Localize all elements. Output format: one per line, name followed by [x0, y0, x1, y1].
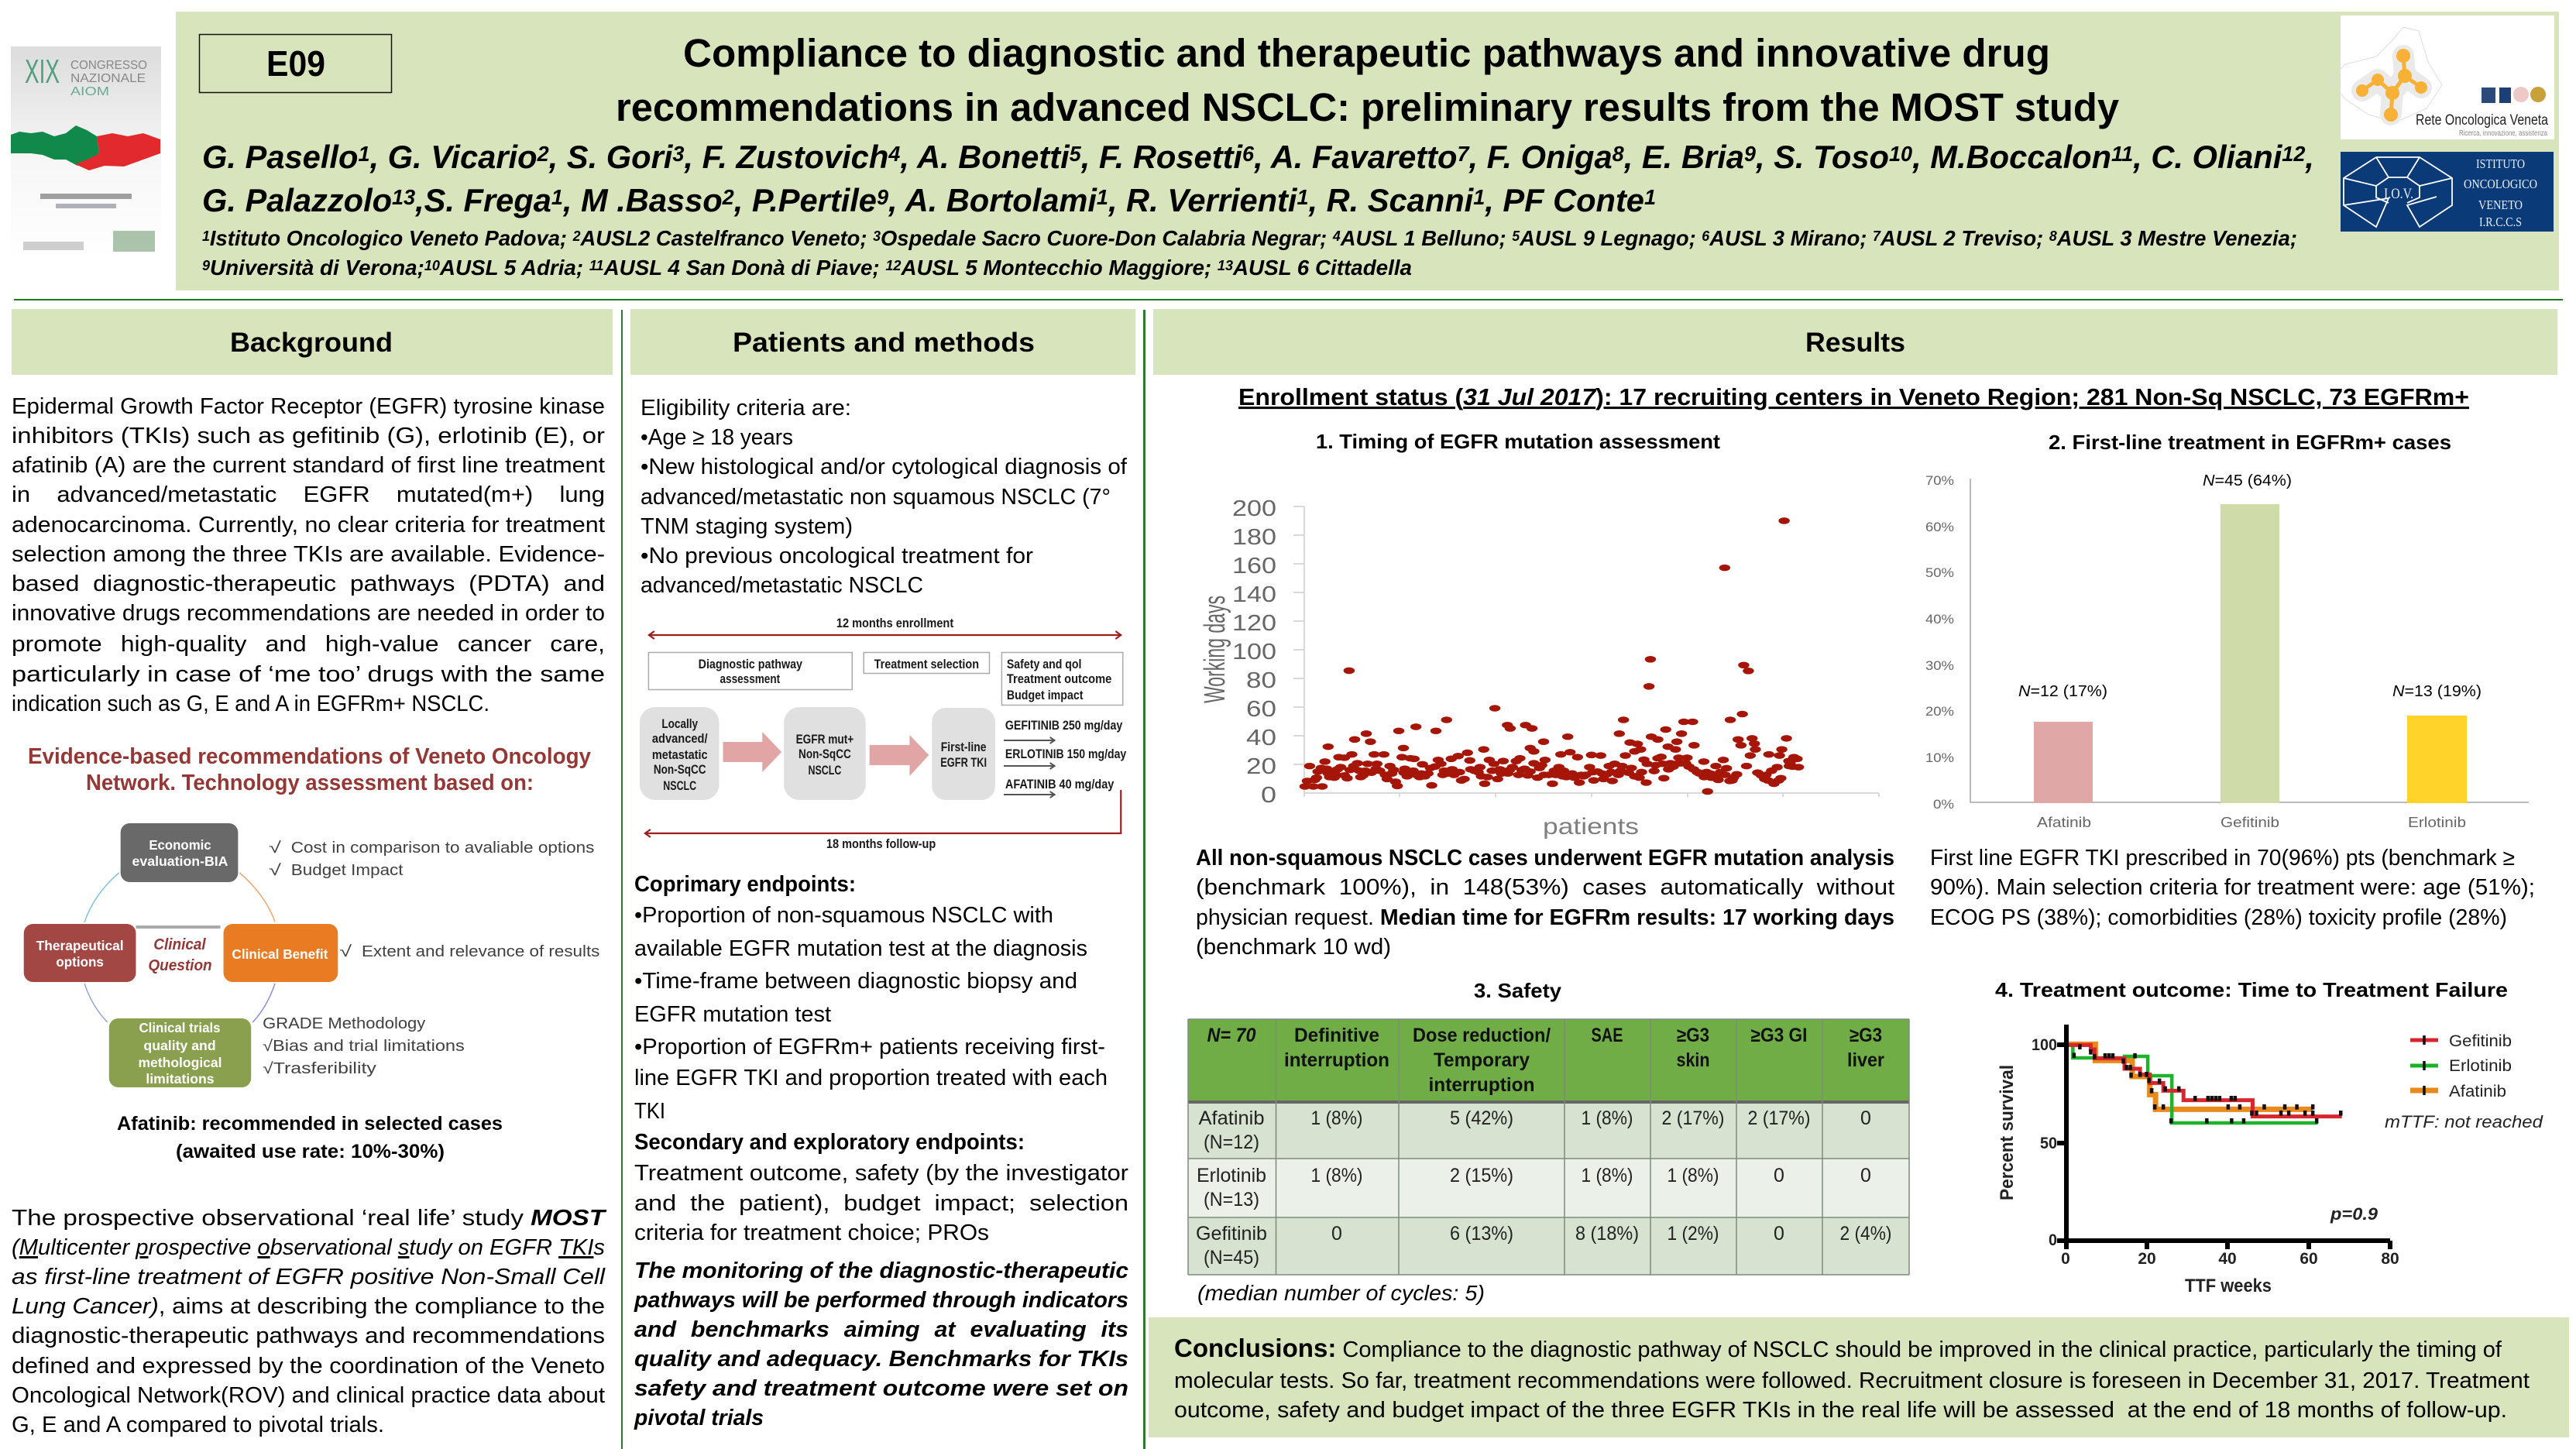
axes: patients: [1543, 814, 1639, 840]
step: first-line EGFR TKI: [932, 708, 995, 800]
header panel: [176, 12, 2559, 290]
row: erlotinib: [1197, 1165, 1871, 1210]
axes: 40%: [1925, 612, 1954, 627]
heading: background: [12, 309, 613, 375]
row: gefitinib: 6 (13%): [1450, 1223, 1513, 1245]
text block: background intro: indication such as G, E and A in EGFRm+ NSCLC.: [12, 692, 489, 716]
step: first-line EGFR TKI: First-line: [941, 740, 987, 754]
authors: [202, 139, 2314, 218]
axes: 140: [1232, 582, 1276, 607]
text block: eligibility: [641, 396, 1128, 598]
treatment arms: GEFITINIB 250 mg/day: [1005, 719, 1123, 733]
box: therapeutical options: [24, 924, 136, 982]
chart: first-line treatment: [1925, 431, 2529, 830]
box: diagnostic pathway assessment: [648, 652, 852, 689]
axes: 0: [2061, 1250, 2070, 1268]
title: Compliance to diagnostic and therapeutic pathways and innovative drug: [683, 31, 2050, 75]
axes: 40: [2218, 1250, 2237, 1268]
heading: results: [1153, 309, 2557, 375]
heading: recommendations: Evidence-based recommendations of Veneto Oncology: [28, 744, 591, 769]
legend: Erlotinib: [2449, 1057, 2512, 1075]
axes: 40: [1246, 726, 1276, 750]
logo: IOV: ONCOLOGICO: [2464, 177, 2537, 191]
affiliations: 9Università di Verona;10AUSL 5 Adria; 11AUSL 4 San Donà di Piave; 12AUSL 5 Montecchio Maggiore; 13AUSL 6 Cittadella: [202, 256, 1412, 280]
table header: liver: [1847, 1049, 1884, 1071]
bar: afatinib: N=12 (17%): [2018, 683, 2107, 700]
logo: IOV: I.O.V.: [2384, 186, 2413, 202]
row: gefitinib: 0: [1331, 1223, 1342, 1245]
step: locally advanced NSCLC: Locally: [661, 717, 699, 731]
step: EGFR mut+: [784, 707, 866, 800]
logo: IOV: I.R.C.C.S: [2479, 215, 2522, 229]
row: afatinib: [1199, 1107, 1871, 1153]
text block: endpoints: line EGFR TKI and proportion treated with each: [634, 1066, 1108, 1090]
row: gefitinib: [1196, 1223, 1891, 1269]
row: gefitinib: Gefitinib: [1196, 1223, 1267, 1245]
step: first-line EGFR TKI: EGFR TKI: [940, 756, 987, 770]
table header: Definitive: [1294, 1025, 1379, 1046]
row: erlotinib: Erlotinib: [1197, 1165, 1266, 1186]
chart title: 1. Timing of EGFR mutation assessment: [1316, 430, 1720, 453]
axes: 20: [2138, 1250, 2156, 1268]
criteria notes: √Trasferibility: [263, 1060, 376, 1077]
row: erlotinib: (N=13): [1204, 1189, 1259, 1210]
box: safety and outcomes: [1001, 652, 1123, 705]
poster code box: [200, 34, 392, 93]
text block: background intro: promote high-quality and high-value cancer care,: [12, 632, 605, 657]
label: clinical question: Clinical: [153, 936, 206, 953]
row: afatinib: 1 (8%): [1310, 1107, 1363, 1129]
text block: chart 2 findings: ECOG PS (38%); comorbidities (28%) toxicity profile (28%): [1930, 905, 2507, 930]
axes: Percent survival: [1997, 1065, 2018, 1200]
row: gefitinib: 2 (4%): [1840, 1223, 1891, 1245]
logo: IOV: ISTITUTO: [2476, 156, 2525, 171]
text block: chart 1 findings: (benchmark 10 wd): [1196, 935, 1391, 960]
logo: congress: AIOM: [70, 85, 109, 98]
treatment arms: ERLOTINIB 150 mg/day: [1005, 747, 1127, 761]
bar: afatinib: Afatinib: [2037, 815, 2091, 830]
title: [616, 31, 2120, 129]
treatment arms: [1004, 719, 1127, 798]
bar: erlotinib: N=13 (19%): [2392, 683, 2482, 700]
callout: afatinib recommendation: (awaited use rate: 10%-30%): [176, 1141, 445, 1162]
text block: background intro: in advanced/metastatic EGFR mutated(m+) lung: [12, 482, 605, 507]
table: safety: [1188, 979, 1909, 1305]
panel: conclusions: [1149, 1317, 2569, 1437]
logo: congress: NAZIONALE: [70, 72, 146, 85]
box: treatment selection: Treatment selection: [874, 658, 979, 671]
text block: eligibility: •Age ≥ 18 years: [641, 425, 793, 450]
axes: 60: [2300, 1250, 2318, 1268]
table header: interruption: [1284, 1049, 1389, 1071]
text block: eligibility: advanced/metastatic non squamous NSCLC (7°: [641, 485, 1111, 510]
row: afatinib: 1 (8%): [1582, 1107, 1633, 1129]
table header: ≥G3: [1677, 1025, 1709, 1046]
panel: conclusions: outcome, safety and budget impact of the three EGFR TKIs in the real life will be assessed at the end of 18 months of follow-up.: [1174, 1398, 2507, 1423]
text block: MOST study: G, E and A compared to pivotal trials.: [12, 1413, 384, 1437]
table header: skin: [1676, 1049, 1710, 1071]
axes: 0: [2049, 1231, 2057, 1249]
text block: endpoints: •Time-frame between diagnostic biopsy and: [634, 969, 1077, 994]
table grid: [1188, 1019, 1909, 1275]
text block: eligibility: advanced/metastatic NSCLC: [641, 573, 923, 598]
affiliations: [202, 226, 2297, 280]
step: EGFR mut+: EGFR mut+: [796, 733, 854, 747]
step: locally advanced NSCLC: advanced/: [652, 732, 708, 746]
legend: Afatinib: [2449, 1083, 2506, 1100]
logo: Rete Oncologica Veneta: Ricerca, innovazione, assistenza: [2459, 129, 2547, 138]
diagram: study flow: [640, 616, 1127, 851]
annotation: p value: p=0.9: [2330, 1204, 2379, 1224]
axes: 160: [1232, 554, 1276, 579]
text block: endpoints: •Proportion of EGFRm+ patients receiving first-: [634, 1035, 1105, 1059]
axes: 0: [1261, 783, 1276, 808]
box: safety and outcomes: Safety and qol: [1007, 658, 1081, 671]
axes: 30%: [1925, 658, 1954, 673]
box: economic evaluation: [121, 823, 238, 882]
box: clinical trials: [109, 1018, 251, 1087]
axes: 60%: [1925, 520, 1954, 534]
text block: monitoring statement: quality and adequacy. Benchmarks for TKIs: [634, 1347, 1128, 1372]
logo: congress: [11, 46, 161, 261]
text block: chart 1 findings: All non-squamous NSCLC cases underwent EGFR mutation analysis: [1196, 846, 1894, 870]
axes: 10%: [1925, 750, 1954, 765]
table header: N= 70: [1207, 1025, 1256, 1046]
criteria notes: Extent and relevance of results: [362, 943, 599, 960]
text block: MOST study: [12, 1206, 607, 1437]
axes: 50%: [1925, 565, 1954, 580]
table title: 3. Safety: [1474, 979, 1562, 1002]
criteria notes: √: [269, 840, 281, 857]
text block: monitoring statement: [634, 1258, 1128, 1430]
panel: conclusions: molecular tests. So far, treatment recommendations were followed. Recruitment closure is foreseen in December 31, 2017. Treatment: [1174, 1368, 2530, 1393]
text block: background intro: innovative drugs recommendations are needed in order to: [12, 601, 605, 626]
text block: endpoints: Secondary and exploratory endpoints:: [634, 1130, 1025, 1155]
step: locally advanced NSCLC: NSCLC: [663, 779, 696, 793]
heading: results: Results: [1805, 328, 1905, 358]
text block: endpoints: TKI: [634, 1099, 665, 1124]
table header: interruption: [1428, 1074, 1535, 1096]
bar: erlotinib: [2392, 683, 2482, 830]
text block: endpoints: [634, 872, 1128, 1245]
arrow: step 2 to 3: [870, 735, 929, 776]
text block: eligibility: •New histological and/or cytological diagnosis of: [641, 455, 1128, 479]
box: clinical trials: quality and: [143, 1038, 216, 1053]
text block: chart 1 findings: physician request. Median time for EGFRm results: 17 working days: [1196, 905, 1894, 930]
criteria notes: Budget Impact: [291, 862, 404, 879]
chart: time to treatment failure: [1995, 978, 2543, 1296]
box: diagnostic pathway assessment: Diagnostic pathway: [699, 658, 803, 671]
row: erlotinib: 0: [1774, 1165, 1784, 1186]
text block: background intro: [12, 394, 605, 716]
criteria notes: √Bias and trial limitations: [263, 1038, 465, 1055]
row: erlotinib: 0: [1860, 1165, 1871, 1186]
text block: eligibility: Eligibility criteria are:: [641, 396, 851, 421]
arrow: 12 months enrollment: 12 months enrollment: [836, 616, 954, 630]
text block: MOST study: diagnostic-therapeutic pathways and recommendations: [12, 1324, 605, 1348]
text block: endpoints: and the patient), budget impact; selection: [634, 1191, 1128, 1216]
text block: chart 2 findings: 90%). Main selection criteria for treatment were: age (51%);: [1930, 875, 2535, 900]
heading: recommendations: Network. Technology assessment based on:: [86, 771, 534, 795]
text block: eligibility: •No previous oncological treatment for: [641, 544, 1033, 568]
text block: background intro: based diagnostic-therapeutic pathways (PDTA) and: [12, 572, 605, 596]
text block: chart 1 findings: [1196, 846, 1894, 960]
axes: 120: [1232, 611, 1276, 636]
box: therapeutical options: options: [56, 954, 104, 970]
text block: eligibility: TNM staging system): [641, 514, 853, 539]
box: therapeutical options: Therapeutical: [36, 938, 124, 953]
logo: IOV: VENETO: [2478, 197, 2523, 212]
heading: patients and methods: Patients and methods: [733, 328, 1035, 358]
table header: SAE: [1591, 1025, 1623, 1046]
row: erlotinib: 1 (8%): [1582, 1165, 1633, 1186]
affiliations: 1Istituto Oncologico Veneto Padova; 2AUSL2 Castelfranco Veneto; 3Ospedale Sacro Cuore-Don Calabria Negrar; 4AUSL 1 Belluno; 5AUSL 9 Legnago; 6AUSL 3 Mirano; 7AUSL 2 Treviso; 8AUSL 3 Mestre Venezia;: [202, 226, 2297, 250]
text block: background intro: inhibitors (TKIs) such as gefitinib (G), erlotinib (E), or: [12, 424, 605, 448]
box: diagnostic pathway assessment: assessment: [720, 672, 781, 686]
text block: endpoints: EGFR mutation test: [634, 1002, 831, 1027]
heading: recommendations: [28, 744, 591, 795]
axes: 50: [2040, 1135, 2057, 1152]
box: economic evaluation: Economic: [149, 837, 211, 853]
logo: IOV: [2341, 152, 2554, 232]
arrow: 12 months enrollment: [649, 616, 1121, 639]
authors: G. Pasello1, G. Vicario2, S. Gori3, F. Zustovich4, A. Bonetti5, F. Rosetti6, A. Favaretto7, F. Oniga8, E. Bria9, S. Toso10, M.Boccalon11, C. Oliani12,: [202, 139, 2314, 175]
callout: afatinib recommendation: [117, 1113, 503, 1162]
text block: background intro: selection among the three TKIs are available. Evidence-: [12, 542, 605, 567]
axes: Working days: [1199, 596, 1231, 703]
text block: endpoints: Coprimary endpoints:: [634, 872, 856, 897]
text block: MOST study: (Multicenter prospective observational study on EGFR TKIs: [12, 1235, 605, 1260]
diagram: clinical question cycle: [24, 823, 599, 1087]
box: clinical trials: Clinical trials: [139, 1020, 221, 1035]
box: clinical benefit: Clinical Benefit: [232, 946, 328, 962]
row: afatinib: 0: [1860, 1107, 1871, 1129]
text block: MOST study: Oncological Network(ROV) and clinical practice data about: [12, 1383, 605, 1408]
text block: MOST study: as first-line treatment of EGFR positive Non-Small Cell: [12, 1265, 606, 1289]
arrow: 18 months follow-up: [645, 790, 1121, 851]
axes: 60: [1246, 697, 1276, 722]
criteria notes: [263, 840, 599, 1077]
row: afatinib: 2 (17%): [1747, 1107, 1811, 1129]
row: afatinib: 2 (17%): [1662, 1107, 1724, 1129]
row: gefitinib: 8 (18%): [1575, 1223, 1639, 1245]
criteria notes: Cost in comparison to avaliable options: [291, 840, 594, 857]
axes: 100: [2032, 1036, 2057, 1054]
step: locally advanced NSCLC: metastatic: [652, 748, 708, 762]
label: clinical question: Question: [148, 957, 212, 974]
title: recommendations in advanced NSCLC: preliminary results from the MOST study: [616, 85, 2120, 129]
text block: background intro: Epidermal Growth Factor Receptor (EGFR) tyrosine kinase: [12, 394, 605, 419]
heading: patients and methods: [630, 309, 1135, 375]
text block: background intro: particularly in case of ‘me too’ drugs with the same: [12, 662, 605, 687]
text block: endpoints: Treatment outcome, safety (by the investigator: [634, 1161, 1128, 1186]
annotation: mTTF: mTTF: not reached: [2385, 1112, 2543, 1131]
logo: congress: XIX: [25, 53, 60, 91]
criteria notes: √: [339, 943, 352, 960]
text block: monitoring statement: safety and treatment outcome were set on: [634, 1376, 1128, 1401]
row: erlotinib: 2 (15%): [1450, 1165, 1513, 1186]
box: clinical trials: methological: [138, 1055, 222, 1070]
row: erlotinib: 1 (8%): [1310, 1165, 1363, 1186]
row: afatinib: Afatinib: [1199, 1107, 1264, 1129]
axes: 70%: [1925, 473, 1954, 488]
panel: conclusions: Conclusions: Compliance to the diagnostic pathway of NSCLC should be improved in the clinical practice, particularly the timing of: [1174, 1334, 2502, 1362]
label: clinical question: [148, 936, 212, 974]
criteria notes: √: [269, 862, 281, 879]
text block: background intro: afatinib (A) are the current standard of first line treatment: [12, 453, 605, 478]
step: locally advanced NSCLC: Non-SqCC: [654, 763, 706, 777]
text block: endpoints: criteria for treatment choice; PROs: [634, 1221, 989, 1245]
row: gefitinib: (N=45): [1204, 1247, 1259, 1269]
legend: [2410, 1032, 2512, 1100]
table note: (median number of cycles: 5): [1197, 1281, 1485, 1305]
bar: gefitinib: [2203, 472, 2292, 830]
text block: endpoints: available EGFR mutation test at the diagnosis: [634, 936, 1087, 961]
row: afatinib: (N=12): [1204, 1131, 1259, 1153]
text block: monitoring statement: and benchmarks aiming at evaluating its: [634, 1317, 1128, 1342]
box: economic evaluation: evaluation-BIA: [132, 853, 228, 869]
chart title: 2. First-line treatment in EGFRm+ cases: [2049, 431, 2451, 454]
logo: Rete Oncologica Veneta: [2330, 15, 2554, 139]
box: safety and outcomes: Treatment outcome: [1007, 672, 1111, 686]
step: locally advanced NSCLC: [640, 707, 719, 800]
axes: [1997, 1025, 2399, 1296]
bar: gefitinib: Gefitinib: [2221, 815, 2279, 830]
axes: 100: [1232, 640, 1276, 664]
legend: Gefitinib: [2449, 1032, 2512, 1050]
text block: chart 1 findings: (benchmark 100%), in 148(53%) cases automatically without: [1196, 875, 1894, 900]
axes: 200: [1232, 496, 1276, 521]
chart: timing of EGFR mutation assessment: [1199, 430, 1879, 840]
table header: Dose reduction/: [1413, 1025, 1551, 1046]
text block: chart 2 findings: First line EGFR TKI prescribed in 70(96%) pts (benchmark ≥: [1930, 846, 2515, 870]
text block: monitoring statement: pathways will be performed through indicators: [634, 1288, 1128, 1313]
scatter points: [1305, 520, 1798, 791]
panel: background: [12, 309, 613, 1437]
axes: 0%: [1933, 797, 1954, 812]
text block: background intro: adenocarcinoma. Currently, no clear criteria for treatment: [12, 513, 605, 537]
axes: 20: [1246, 754, 1276, 779]
table header: [1207, 1025, 1884, 1096]
axes: 180: [1232, 525, 1276, 550]
chart title: 4. Treatment outcome: Time to Treatment Failure: [1995, 978, 2508, 1001]
arrow: step 1 to 2: [723, 732, 781, 772]
panel: patients and methods: [630, 309, 1135, 1430]
text block: MOST study: Lung Cancer) , aims at describing the compliance to the: [12, 1294, 605, 1319]
text block: monitoring statement: pivotal trials: [634, 1406, 764, 1430]
bar: afatinib: [2018, 683, 2107, 830]
axes: TTF weeks: [2185, 1276, 2272, 1296]
arrow: 18 months follow-up: 18 months follow-up: [826, 837, 936, 851]
box: clinical trials: limitations: [146, 1071, 215, 1087]
table header: Temporary: [1434, 1049, 1530, 1071]
table header: ≥G3: [1850, 1025, 1882, 1046]
text block: monitoring statement: The monitoring of the diagnostic-therapeutic: [634, 1258, 1128, 1283]
panel: results: [1149, 309, 2569, 1437]
axes: 80: [1246, 668, 1276, 693]
text block: chart 2 findings: [1930, 846, 2535, 930]
poster code box: E09: [266, 43, 325, 84]
table header: ≥G3 GI: [1750, 1025, 1808, 1046]
step: EGFR mut+: NSCLC: [809, 764, 841, 778]
authors: G. Palazzolo13,S. Frega1, M .Basso2, P.Pertile9, A. Bortolami1, R. Verrienti1, R. Scanni1, PF Conte1: [202, 182, 1656, 218]
step: EGFR mut+: Non-SqCC: [799, 747, 851, 761]
text block: MOST study: defined and expressed by the coordination of the Veneto: [12, 1354, 605, 1379]
axes: [1925, 473, 2529, 812]
bar: gefitinib: N=45 (64%): [2203, 472, 2292, 489]
box: safety and outcomes: Budget impact: [1007, 688, 1084, 702]
bar: erlotinib: Erlotinib: [2408, 815, 2466, 830]
box: clinical benefit: [224, 924, 338, 982]
heading: background: Background: [230, 328, 393, 358]
text block: MOST study: The prospective observational ‘real life’ study MOST: [12, 1206, 607, 1231]
row: gefitinib: 0: [1774, 1223, 1784, 1245]
callout: afatinib recommendation: Afatinib: recommended in selected cases: [117, 1113, 503, 1135]
survival curves: [2066, 1044, 2342, 1124]
axes: 80: [2381, 1250, 2399, 1268]
criteria notes: GRADE Methodology: [263, 1015, 425, 1032]
row: afatinib: 5 (42%): [1450, 1107, 1513, 1129]
axes: 20%: [1925, 704, 1954, 719]
treatment arms: AFATINIB 40 mg/day: [1005, 778, 1115, 791]
row: gefitinib: 1 (2%): [1667, 1223, 1719, 1245]
text block: endpoints: •Proportion of non-squamous NSCLC with: [634, 903, 1053, 928]
axes: [1199, 496, 1879, 840]
row: erlotinib: 1 (8%): [1667, 1165, 1719, 1186]
logo: congress: CONGRESSO: [70, 59, 147, 72]
logo: Rete Oncologica Veneta: Rete Oncologica Veneta: [2416, 112, 2548, 129]
box: treatment selection: [864, 652, 989, 674]
heading: enrollment status: Enrollment status ( 31 Jul 2017): 17 recruiting centers in Veneto Region; 281 Non-Sq NSCLC, 73 EGFRm+: [1238, 383, 2469, 410]
